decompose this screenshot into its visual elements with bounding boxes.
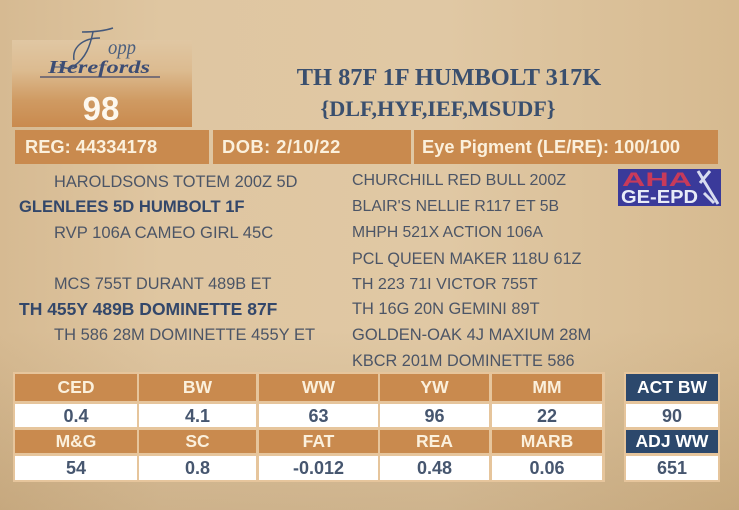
EPD table: SC	[185, 431, 210, 451]
icon: AHA GE-EPD badge	[618, 169, 721, 206]
actual weights table: 90	[662, 406, 682, 426]
icon: AHA GE-EPD badge: AHA	[622, 170, 692, 191]
actual weights table: ACT BW	[637, 377, 707, 397]
EPD table: MM	[532, 377, 562, 397]
pedigree: sire side	[19, 173, 298, 242]
pedigree: grandparents column: BLAIR'S NELLIE R117 ET 5B	[352, 198, 559, 215]
pedigree: dam side: TH 586 28M DOMINETTE 455Y ET	[54, 326, 315, 344]
pedigree: grandparents column: TH 223 71I VICTOR 755T	[352, 275, 538, 293]
EPD table: 4.1	[185, 406, 210, 426]
EPD table: 0.48	[417, 458, 452, 478]
EPD table: -0.012	[293, 458, 344, 478]
EPD table: FAT	[303, 431, 334, 451]
pedigree: grandparents column	[352, 172, 591, 370]
EPD table: CED	[58, 377, 94, 397]
EPD table	[13, 372, 605, 482]
lot number: 98	[83, 90, 119, 127]
pedigree: grandparents column: PCL QUEEN MAKER 118U 61Z	[352, 250, 581, 268]
actual weights table: 651	[657, 458, 687, 478]
pedigree: grandparents column: CHURCHILL RED BULL 200Z	[352, 172, 566, 189]
EPD table: 0.06	[529, 458, 565, 478]
pedigree: grandparents column: TH 16G 20N GEMINI 89T	[352, 300, 540, 318]
pedigree: dam side	[19, 275, 315, 344]
EPD table: 96	[424, 406, 445, 426]
registration bar	[15, 130, 209, 164]
date of birth bar: DOB: 2/10/22	[222, 136, 341, 157]
genetic status: {DLF,HYF,IEF,MSUDF}	[320, 96, 556, 121]
EPD table: 0.8	[185, 458, 210, 478]
EPD table: REA	[416, 431, 453, 451]
actual weights table: ADJ WW	[636, 431, 708, 451]
EPD table: 22	[537, 406, 557, 426]
eye pigment bar	[414, 130, 718, 164]
EPD table: 63	[308, 406, 329, 426]
logo: Topp Herefords	[40, 27, 160, 78]
registration bar: REG: 44334178	[25, 136, 157, 157]
logo panel	[12, 40, 192, 127]
pedigree: dam side: TH 455Y 489B DOMINETTE 87F	[19, 299, 277, 319]
EPD table: M&G	[56, 431, 96, 451]
EPD table: MARB	[521, 431, 573, 451]
eye pigment bar: Eye Pigment (LE/RE): 100/100	[422, 136, 680, 157]
EPD table: YW	[420, 377, 449, 397]
pedigree: sire side: RVP 106A CAMEO GIRL 45C	[54, 223, 273, 242]
pedigree: sire side: HAROLDSONS TOTEM 200Z 5D	[54, 173, 298, 191]
animal name: TH 87F 1F HUMBOLT 317K	[297, 64, 601, 91]
pedigree: grandparents column: MHPH 521X ACTION 106A	[352, 224, 543, 241]
pedigree: grandparents column: KBCR 201M DOMINETTE 586	[352, 352, 575, 370]
EPD table: 54	[66, 458, 86, 478]
logo: Topp Herefords: Herefords	[47, 57, 150, 77]
logo: Topp Herefords: opp	[108, 37, 136, 59]
EPD table: 0.4	[63, 406, 89, 426]
EPD table: WW	[302, 377, 335, 397]
actual weights table	[624, 372, 720, 482]
EPD table: BW	[183, 377, 212, 397]
pedigree: dam side: MCS 755T DURANT 489B ET	[54, 275, 271, 293]
pedigree: grandparents column: GOLDEN-OAK 4J MAXIUM 28M	[352, 326, 591, 344]
pedigree: sire side: GLENLEES 5D HUMBOLT 1F	[19, 197, 245, 216]
date of birth bar	[213, 130, 411, 164]
